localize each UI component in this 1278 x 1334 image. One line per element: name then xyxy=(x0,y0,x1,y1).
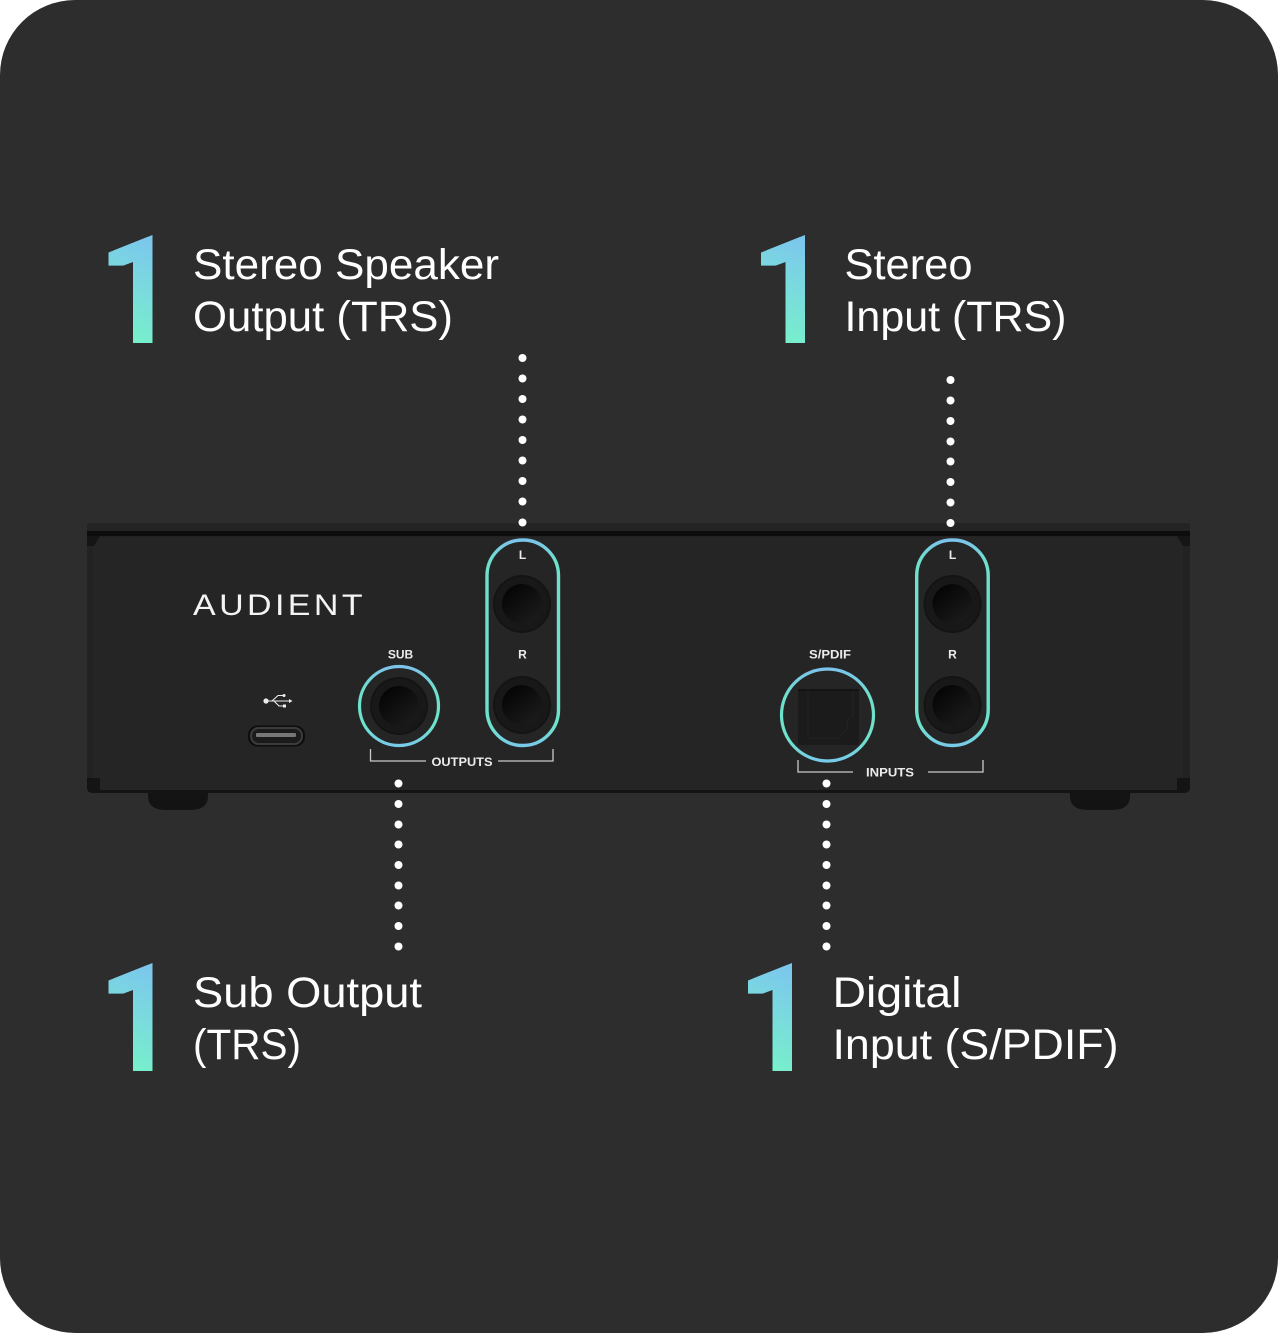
highlight pill: speaker outputs xyxy=(487,540,558,746)
label: Sub Output xyxy=(193,969,422,1017)
dotted leader: speaker output xyxy=(518,354,526,526)
label: Output (TRS) xyxy=(193,293,453,341)
number: 1 xyxy=(738,901,824,1114)
dotted leader: sub output xyxy=(394,780,402,950)
bracket: outputs xyxy=(370,749,553,769)
dotted leader: stereo input xyxy=(946,376,954,527)
device chassis xyxy=(87,523,1190,793)
panel label: input L: L xyxy=(949,548,956,562)
callout: digital input xyxy=(748,963,1116,1071)
logo: AUDIENT: AUDIENT xyxy=(193,589,366,622)
jack: output L xyxy=(493,575,551,633)
jack: sub output xyxy=(370,677,428,735)
callout: sub output xyxy=(108,963,422,1071)
label: Stereo Speaker xyxy=(193,241,499,289)
S/PDIF optical port xyxy=(798,689,859,745)
number: 1 xyxy=(98,901,185,1114)
panel label: input R: R xyxy=(948,648,957,662)
label: Input (TRS) xyxy=(844,293,1066,341)
label xyxy=(193,241,499,341)
jack: output R xyxy=(493,676,551,734)
highlight ring: sub output xyxy=(360,666,438,746)
panel label: SUB: SUB xyxy=(388,648,413,662)
callout: stereo input xyxy=(761,235,1064,343)
jack: input R xyxy=(924,676,982,734)
label: Input (S/PDIF) xyxy=(832,1021,1118,1069)
highlight pill: stereo inputs xyxy=(917,540,988,746)
panel label: S/PDIF: S/PDIF xyxy=(809,648,851,662)
dotted leader: digital input xyxy=(822,780,830,950)
number: 1 xyxy=(750,173,837,386)
jack: input L xyxy=(924,575,982,633)
panel label: output L: L xyxy=(519,548,526,562)
highlight ring: S/PDIF xyxy=(782,669,874,761)
icon: USB symbol xyxy=(263,694,292,708)
USB-C port xyxy=(248,726,305,746)
label xyxy=(844,241,1066,341)
device: audio interface rear panel xyxy=(87,523,1190,810)
number: 1 xyxy=(98,173,185,386)
label: (TRS) xyxy=(193,1021,301,1069)
callout: stereo speaker output xyxy=(108,235,498,343)
label: Digital xyxy=(832,969,962,1017)
bracket: outputs: OUTPUTS xyxy=(432,755,492,769)
device feet xyxy=(148,790,1130,810)
panel label: output R: R xyxy=(518,648,527,662)
bracket: inputs: INPUTS xyxy=(866,766,914,780)
label xyxy=(832,969,1118,1069)
label: Stereo xyxy=(844,241,972,289)
label xyxy=(193,969,422,1069)
bracket: inputs xyxy=(798,760,983,780)
